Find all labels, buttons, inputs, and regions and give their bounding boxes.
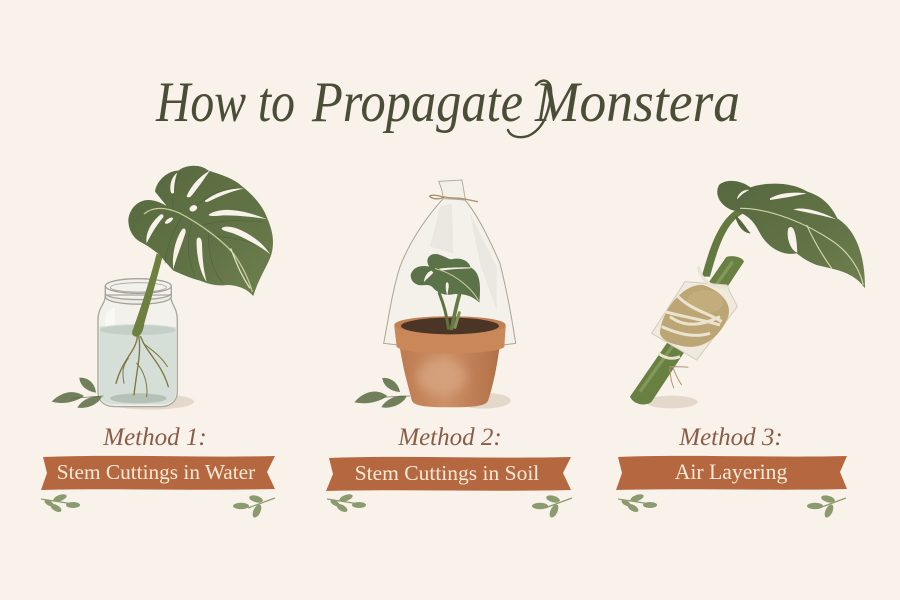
plastic wrap (652, 282, 737, 360)
jar highlight (105, 307, 115, 327)
leaf cuts (737, 190, 837, 253)
sprig left (618, 493, 657, 514)
method 3 banner text: Air Layering (675, 460, 787, 484)
stem (132, 253, 163, 337)
method 1 banner (41, 456, 275, 490)
pot body (400, 348, 499, 407)
roots (116, 333, 168, 397)
method 1 heading: Method 1: (102, 424, 207, 451)
small monstera leaf (411, 254, 480, 303)
method 3 banner (616, 456, 847, 490)
method 2 label (326, 424, 572, 519)
title (155, 71, 740, 137)
sprig right (233, 494, 275, 519)
title: How to (155, 71, 295, 134)
bag neck (439, 180, 465, 199)
twine tail (670, 367, 688, 388)
small leaves (354, 378, 410, 408)
lower lobe (735, 215, 751, 233)
leaf (717, 181, 865, 288)
jar body (98, 295, 177, 407)
pot rim (394, 319, 506, 354)
shadow (106, 394, 194, 410)
sprig right (807, 494, 846, 519)
jar neck rim (105, 279, 171, 304)
sprig left (41, 493, 80, 514)
title: Propagate (311, 71, 523, 134)
monstera leaf (128, 166, 273, 296)
leaf midrib (740, 208, 863, 285)
sprig left (327, 493, 366, 514)
bag folds (430, 203, 497, 310)
water (99, 324, 176, 405)
pot texture (417, 358, 467, 395)
method 3 heading: Method 3: (678, 424, 783, 451)
shadow (646, 396, 698, 408)
illustration: air layering stem (630, 181, 865, 408)
midrib (144, 208, 252, 292)
moss (660, 285, 729, 347)
jar bottom (110, 393, 167, 403)
soil (401, 318, 499, 334)
plant stems (439, 293, 459, 328)
leaf slits (146, 171, 270, 282)
method 1 label (41, 424, 275, 519)
method 3 label (616, 424, 847, 519)
method 2 banner (326, 457, 571, 491)
moss highlights (687, 290, 723, 313)
method 2 heading: Method 2: (397, 424, 502, 451)
petiole (702, 209, 752, 277)
leaf veins (165, 173, 270, 283)
illustration: water jar with cutting (52, 166, 273, 410)
main stem (630, 256, 744, 404)
shadow (456, 393, 511, 409)
small leaf cuts (424, 267, 471, 295)
small leaf midrib (435, 269, 479, 301)
title: Monstera (534, 71, 740, 134)
sprig right (532, 494, 572, 519)
twine (429, 195, 478, 202)
method 2 banner text: Stem Cuttings in Soil (355, 461, 539, 485)
method 1 banner text: Stem Cuttings in Water (57, 460, 255, 484)
small leaves (52, 378, 103, 408)
plastic bag (384, 198, 516, 345)
twine wraps (658, 267, 729, 358)
water surface (100, 325, 176, 335)
illustration: pot under plastic bag (354, 180, 516, 409)
